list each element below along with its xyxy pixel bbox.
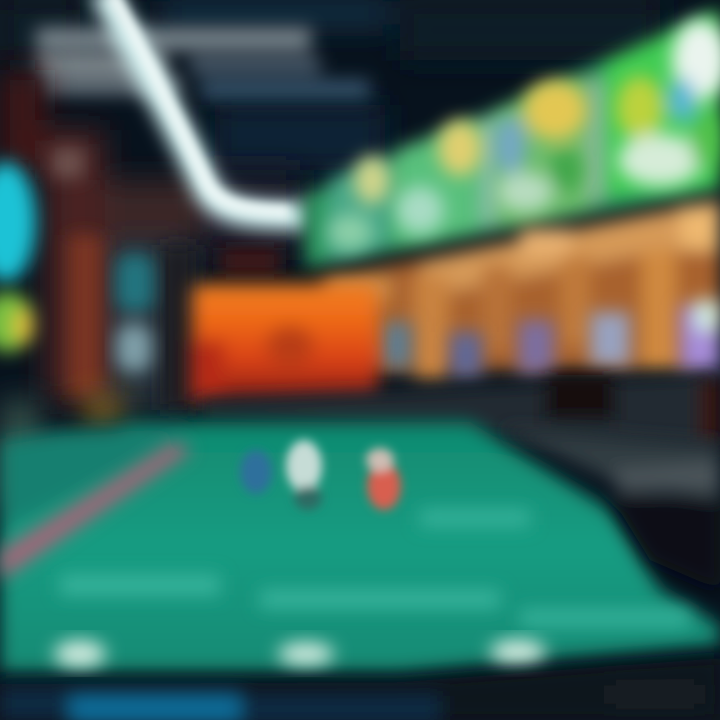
dark band behind the floor xyxy=(200,375,720,450)
left wall: brown pillars xyxy=(0,70,300,410)
panel: green casino floor xyxy=(0,422,720,672)
icon: cyan oval xyxy=(0,162,36,282)
panel: orange wooden wall xyxy=(320,200,720,380)
window panels: left pillar xyxy=(116,254,154,372)
panel: green screens xyxy=(305,8,720,268)
icon: white figure xyxy=(286,440,322,510)
curved white light strip xyxy=(102,0,310,216)
floor stripe xyxy=(0,442,192,580)
ceiling xyxy=(0,0,660,170)
left lower machines xyxy=(0,395,120,510)
icon: green and yellow orb xyxy=(0,292,34,352)
bottom band xyxy=(0,658,720,720)
icon: red figure xyxy=(366,448,401,510)
heading: blurred title text xyxy=(36,28,370,98)
floor lights xyxy=(54,639,546,668)
row of small screens xyxy=(380,300,720,378)
icon: blue figure xyxy=(240,450,272,494)
grey steps right xyxy=(500,428,720,590)
floor highlights xyxy=(60,510,690,626)
panel: orange counter xyxy=(190,284,378,402)
